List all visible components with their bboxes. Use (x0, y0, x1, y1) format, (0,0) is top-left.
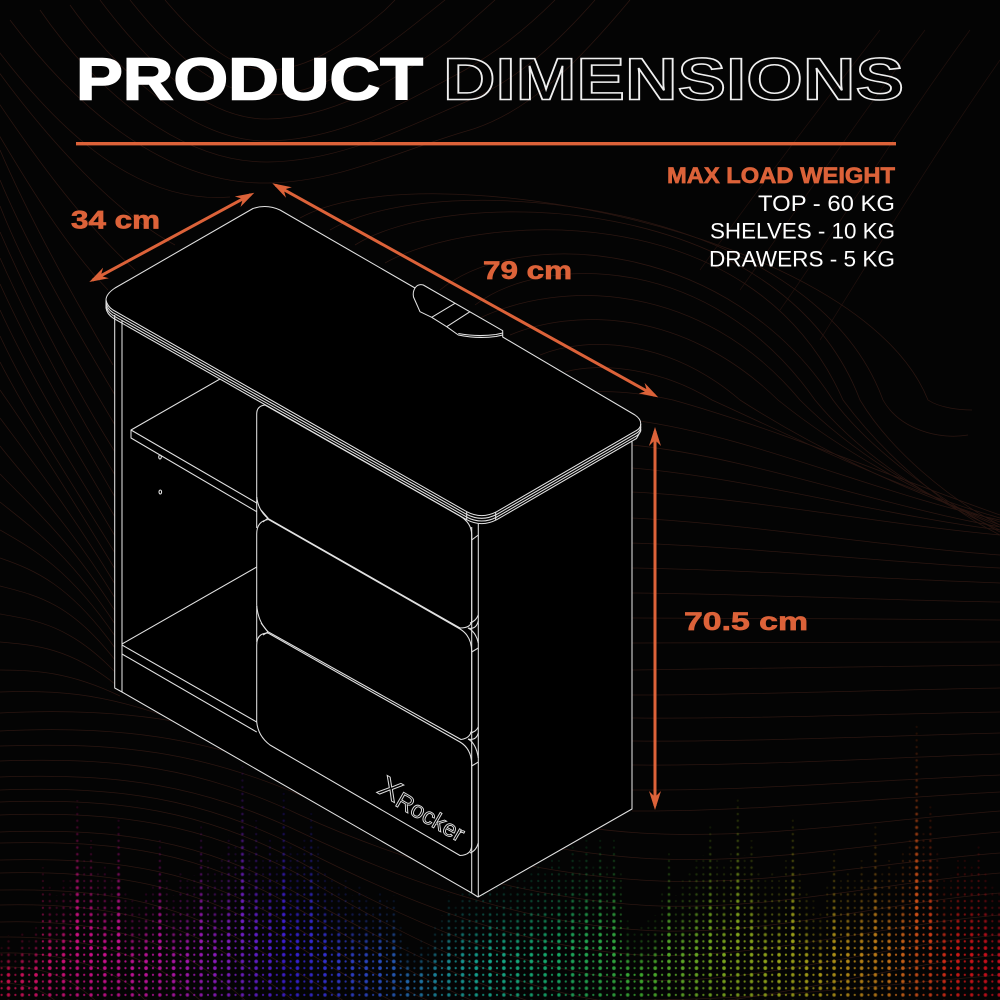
load heading: MAX LOAD WEIGHT (667, 163, 895, 188)
logo: Rocker: Rocker (392, 787, 470, 847)
drawer 2 (257, 520, 472, 740)
cable cutout (413, 288, 503, 337)
middle shelf (131, 379, 257, 512)
drawer joint details (257, 497, 478, 853)
furniture line drawing (106, 206, 641, 897)
label: 34 cm: 34 cm (71, 206, 160, 234)
furniture: black silhouette (115, 310, 632, 897)
dimension: 34 cm (71, 195, 251, 280)
label: 79 cm: 79 cm (483, 257, 572, 285)
drawer 3 (257, 633, 472, 856)
logo: X: X (372, 770, 408, 809)
dimension: 79 cm (276, 185, 655, 395)
background: rainbow equaliser dots (0, 700, 1000, 1000)
drawer 1 (257, 405, 472, 628)
title: filled word: PRODUCT (76, 46, 423, 112)
brand logo (372, 770, 470, 847)
title (76, 46, 904, 112)
arrow: width (276, 185, 655, 395)
label: 70.5 cm: 70.5 cm (684, 608, 808, 636)
arrow: depth (93, 195, 251, 280)
arrow: height (654, 431, 656, 806)
max load weight (667, 163, 895, 272)
side and bottom panels (115, 315, 632, 897)
load: drawers: DRAWERS - 5 KG (709, 246, 895, 272)
bottom shelf and plinth (122, 567, 257, 732)
shelf pegs (159, 455, 162, 494)
desk top surface (106, 206, 641, 524)
desk top edge layers (106, 300, 641, 521)
orange rule (76, 142, 896, 145)
title: outlined word: DIMENSIONS (443, 46, 904, 112)
load: top: TOP - 60 KG (758, 191, 895, 216)
load: shelves: SHELVES - 10 KG (710, 218, 895, 244)
